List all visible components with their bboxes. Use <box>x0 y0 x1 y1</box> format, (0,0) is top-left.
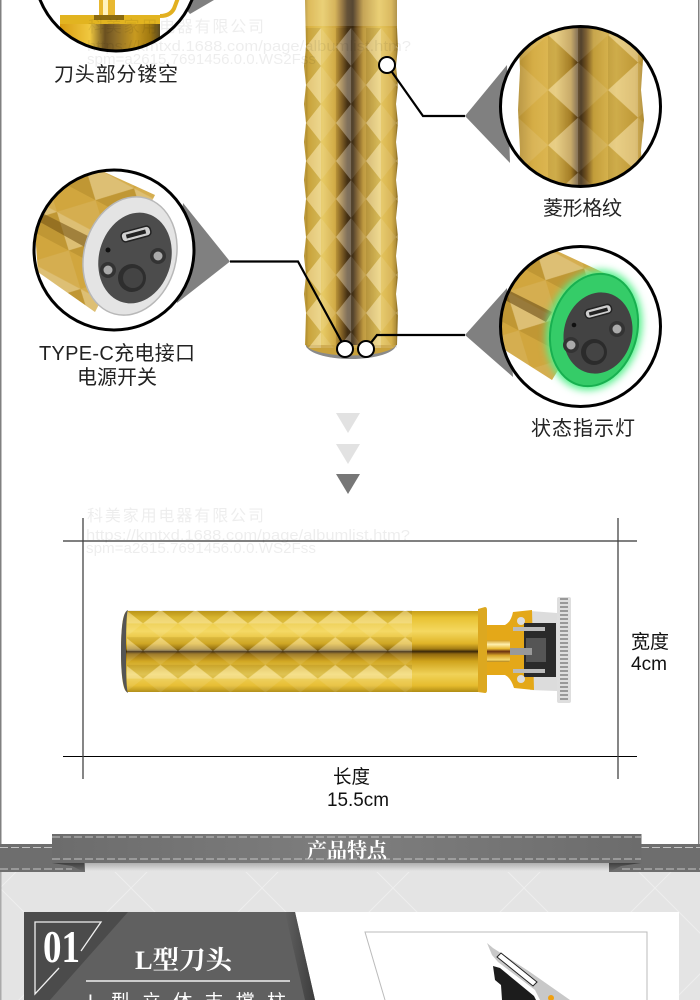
side ribbons <box>0 844 700 872</box>
watermark top: 科美家用电器有限公司 <box>88 18 264 36</box>
callout dots <box>337 57 395 357</box>
number badge <box>35 921 101 994</box>
label: type-c port and power switch: 电源开关 <box>77 366 157 389</box>
watermark bottom: spm=a2615.7691456.0.0.WS2Fss <box>86 540 316 557</box>
length label <box>327 766 389 811</box>
dark title block <box>24 912 315 1000</box>
length label: 15.5cm <box>327 790 389 811</box>
product photo fragment <box>487 943 570 1000</box>
callout pointer <box>465 288 513 377</box>
brass pin <box>484 640 510 662</box>
callout: status light <box>366 245 660 406</box>
title rule <box>86 980 290 982</box>
feature title: L型刀头 <box>135 945 234 975</box>
width label <box>631 631 669 675</box>
watermark bottom: 科美家用电器有限公司 <box>87 507 264 525</box>
down arrows <box>336 413 360 494</box>
circle detail <box>495 245 660 406</box>
width label: 4cm <box>631 654 667 675</box>
width label: 宽度 <box>631 631 669 653</box>
end cap <box>121 610 128 693</box>
dimension frame <box>63 518 637 779</box>
watermark top: spm=a2615.7691456.0.0.WS2Fss <box>87 51 316 68</box>
blade teeth <box>557 597 571 703</box>
label: type-c port and power switch: TYPE-C充电接口 <box>39 342 195 365</box>
leader line <box>366 335 465 349</box>
ribbon folds <box>52 863 84 872</box>
main ribbon <box>52 834 642 863</box>
gold head mount <box>487 610 534 690</box>
circle detail <box>500 20 660 195</box>
section ribbon <box>0 834 700 872</box>
callout: diamond texture <box>387 20 660 195</box>
watermark bottom <box>86 507 410 557</box>
circle detail <box>30 165 194 330</box>
silver blade plate <box>530 611 557 691</box>
callout pointer <box>465 65 510 163</box>
leader line <box>387 65 465 116</box>
label: diamond texture: 菱形格纹 <box>543 197 622 220</box>
feature panel 01 <box>24 912 679 1000</box>
handle <box>121 611 480 692</box>
label: hollow cutter head: 刀头部分镂空 <box>54 63 178 86</box>
callout: type-c port <box>30 165 345 348</box>
label: type-c port and power switch <box>39 342 195 389</box>
number badge: 01 <box>43 921 80 972</box>
callout pointer <box>177 203 230 303</box>
watermark top: https://kmtxd.1688.com/page/albumlist.htm? <box>87 38 411 55</box>
length label: 长度 <box>333 766 370 788</box>
lower section background <box>0 863 700 1000</box>
vertical trimmer handle <box>304 0 398 359</box>
black mechanism <box>510 617 556 683</box>
label: status light: 状态指示灯 <box>531 417 635 440</box>
section title: 产品特点 <box>307 839 389 862</box>
product frame <box>365 932 647 1000</box>
leader line <box>230 262 345 348</box>
detail circle: hollow cutter head <box>38 0 214 52</box>
horizontal trimmer <box>121 597 571 703</box>
watermark bottom: https://kmtxd.1688.com/page/albumlist.htm? <box>86 527 410 544</box>
collar <box>478 607 487 693</box>
panel background <box>24 912 679 1000</box>
watermark top <box>87 18 411 68</box>
